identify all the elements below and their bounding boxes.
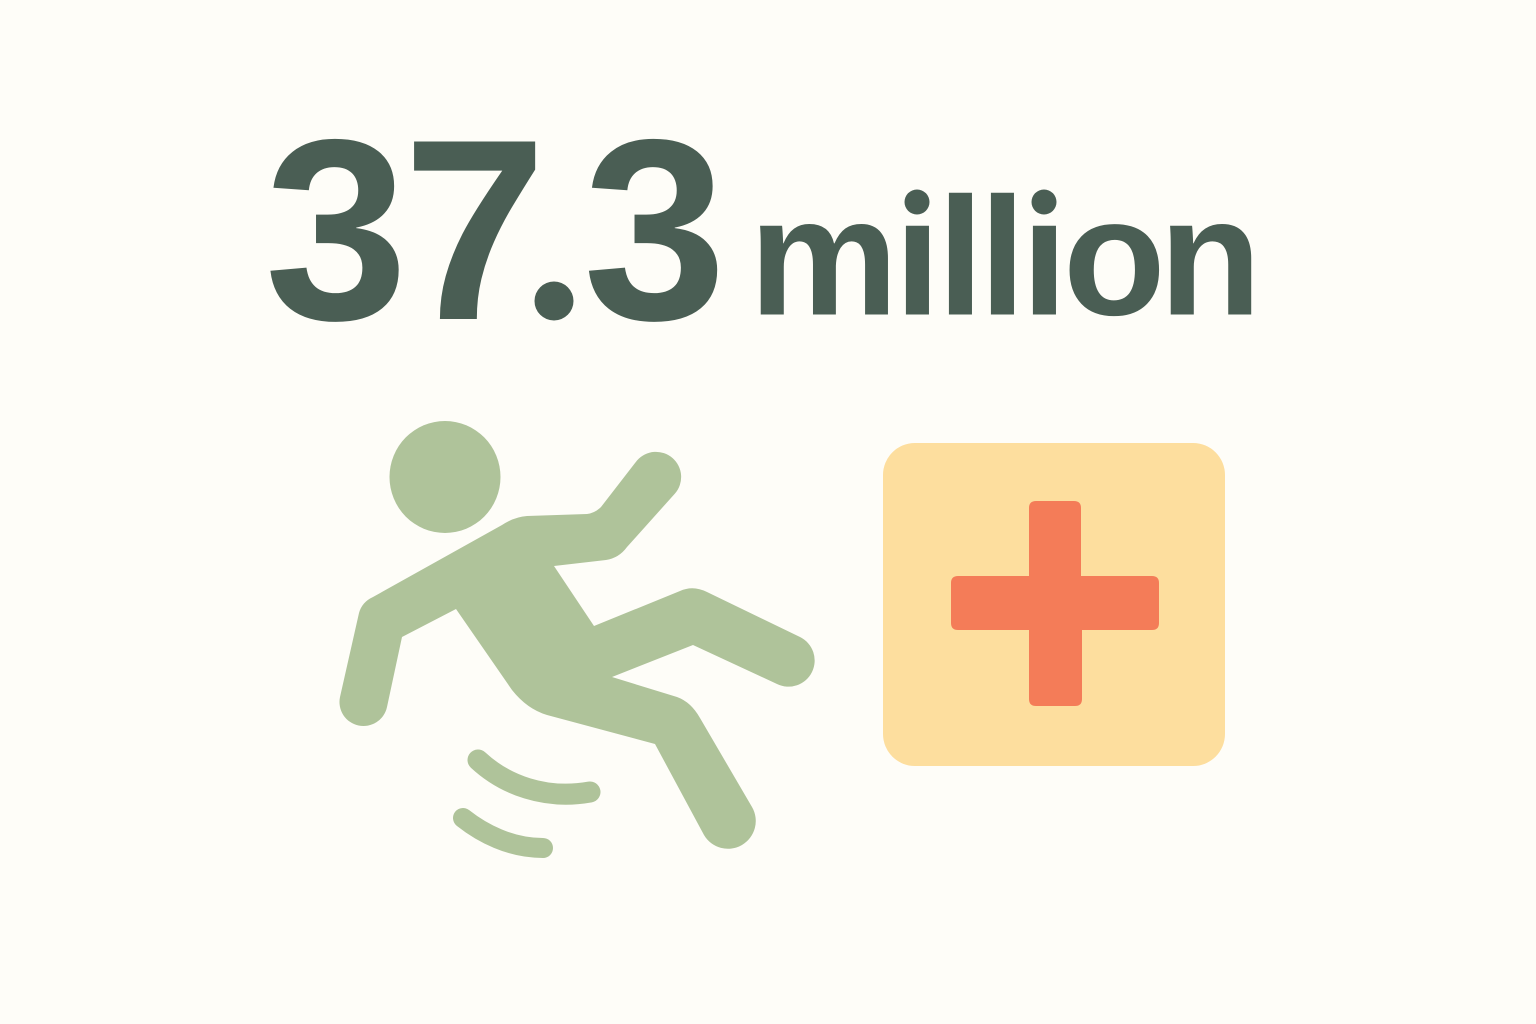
icon: falling person	[339, 421, 815, 849]
icon: medical cross	[883, 443, 1225, 766]
motion line: lower	[463, 818, 543, 848]
big number: 3	[583, 85, 726, 374]
unit label: million	[749, 162, 1262, 350]
big number: .	[530, 161, 577, 351]
motion line: upper	[478, 760, 590, 794]
body and limbs	[339, 452, 815, 849]
red cross	[951, 501, 1159, 706]
badge background	[883, 443, 1225, 766]
head	[390, 421, 500, 533]
big number	[264, 85, 726, 374]
big number: 37	[264, 85, 546, 374]
title: 37.3 million	[264, 85, 1262, 374]
